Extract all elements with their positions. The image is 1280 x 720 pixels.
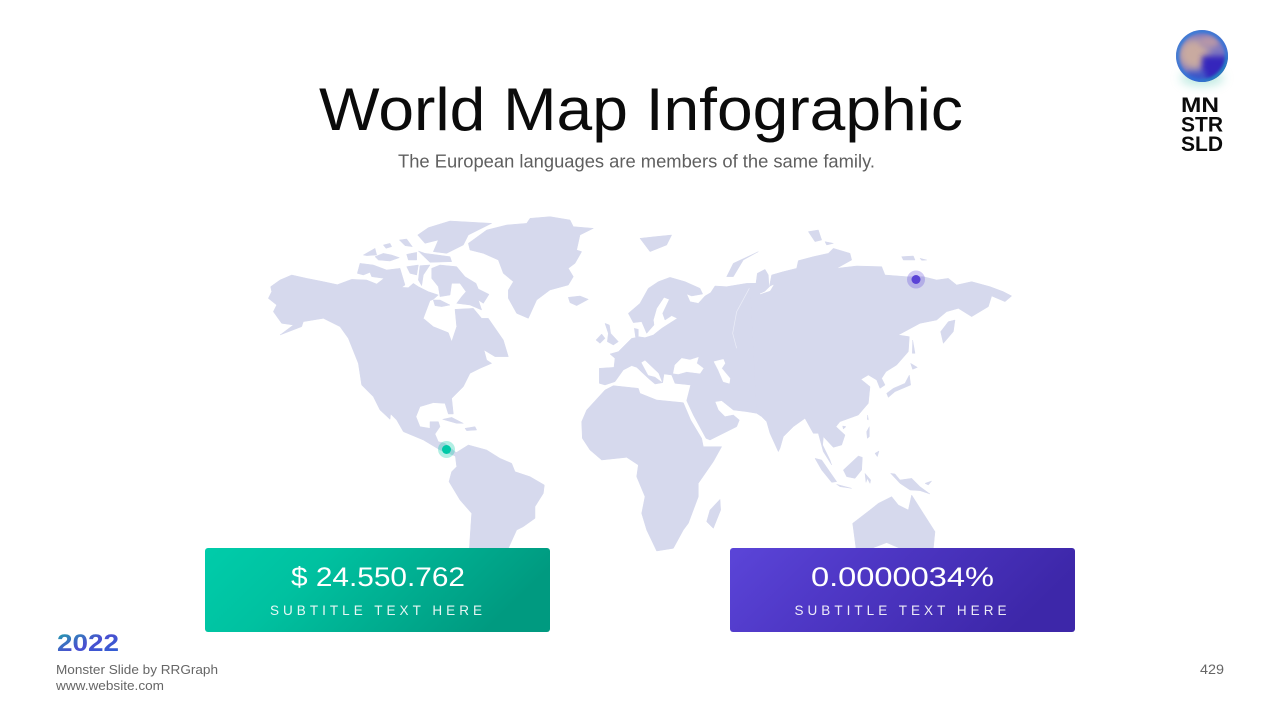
footer credit: www.website.com [55, 678, 164, 693]
North America mainland [268, 263, 508, 456]
marker: Siberia [907, 270, 925, 288]
map: Asia, Africa and Oceania [582, 230, 1012, 551]
Southeast Asia islands [815, 415, 879, 488]
Arctic islands [640, 230, 927, 277]
Iceland [568, 296, 588, 306]
icon: gradient orb [1176, 30, 1230, 86]
Ob Gulf [760, 285, 773, 294]
Asia [750, 248, 1012, 465]
map: Americas and Greenland [268, 217, 593, 548]
footer year: 2022 [57, 630, 119, 657]
South America [449, 445, 544, 548]
Australia [853, 495, 935, 548]
Europe and Middle East [599, 277, 757, 440]
logo wordmark: MN [1181, 94, 1219, 117]
Africa [582, 386, 722, 551]
Ural border line [733, 288, 749, 348]
Japan and Sakhalin [887, 340, 917, 397]
world map [268, 217, 1012, 551]
marker: Central America [438, 441, 455, 458]
stat card: green [205, 548, 550, 632]
Kamchatka [941, 320, 955, 343]
Madagascar [707, 499, 721, 528]
footer credit [55, 662, 218, 693]
map: Canadian Arctic islands [363, 221, 492, 310]
stat subtitle: SUBTITLE TEXT HERE [794, 603, 1006, 618]
Ellesmere Island [418, 221, 492, 253]
stat value: $ 24.550.762 [291, 562, 465, 592]
subtitle: The European languages are members of the same family. [398, 152, 875, 172]
Great Britain and Ireland [596, 323, 618, 345]
smaller Arctic islands [363, 239, 452, 307]
Greenland [468, 217, 593, 318]
logo [1176, 30, 1230, 156]
New Guinea [891, 473, 932, 494]
Caribbean islands [443, 417, 477, 431]
footer credit: Monster Slide by RRGraph [56, 662, 218, 677]
logo wordmark [1181, 94, 1223, 156]
stat value: 0.0000034% [811, 562, 994, 592]
logo wordmark: STR [1181, 114, 1223, 136]
inland seas [642, 357, 730, 383]
Baffin Island [432, 265, 489, 310]
stat subtitle: SUBTITLE TEXT HERE [270, 603, 482, 618]
page number: 429 [1200, 661, 1224, 677]
title: World Map Infographic [319, 76, 963, 143]
logo wordmark: SLD [1181, 133, 1223, 156]
stat card: purple [730, 548, 1075, 632]
map: Europe and Arabia [596, 277, 757, 440]
